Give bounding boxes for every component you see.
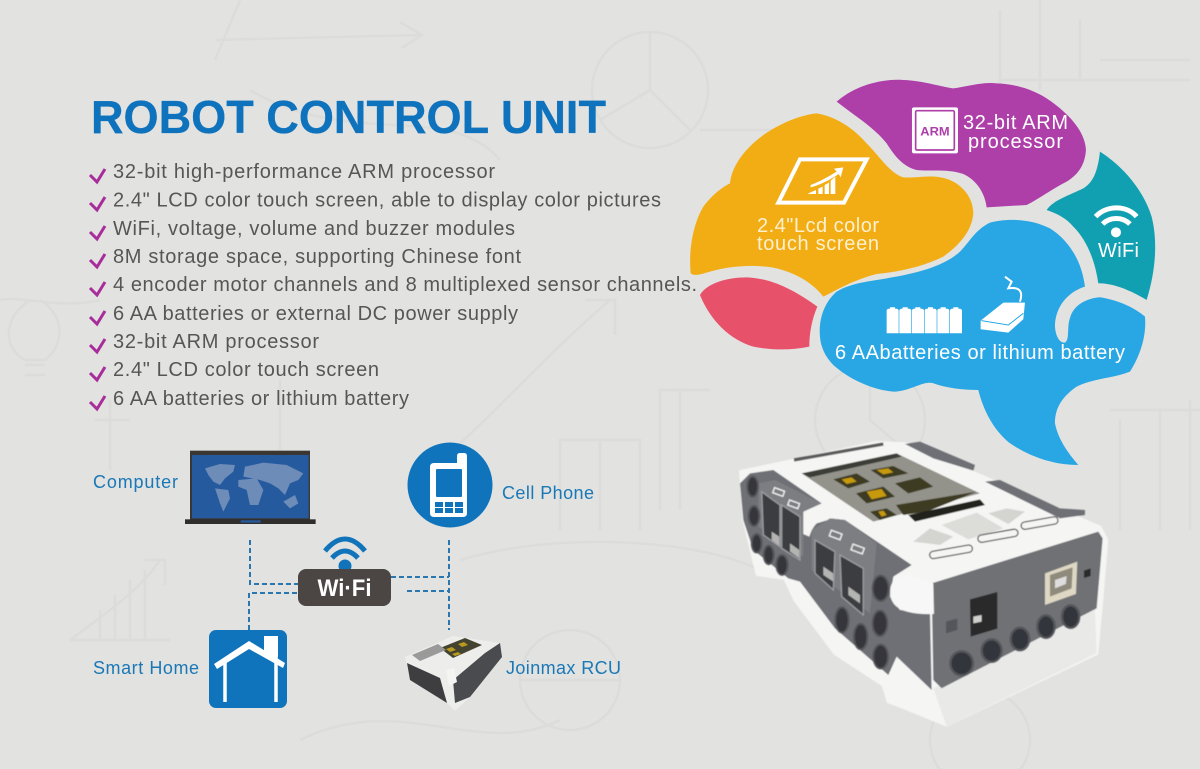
- front panel: [932, 532, 1103, 688]
- panel: WiFi: [1047, 152, 1155, 300]
- cloud labels: touch screen: [757, 233, 879, 255]
- icon: WiFi router badge: Wi·Fi: [318, 575, 372, 602]
- feature text lines: 4 encoder motor channels and 8 multiplexed sensor channels.: [113, 274, 697, 296]
- feature text lines: 2.4" LCD color touch screen, able to display color pictures: [113, 190, 661, 212]
- front holes: [950, 605, 1079, 675]
- icon: AA batteries: [887, 307, 962, 333]
- icon: tablet chart: [778, 159, 867, 203]
- feature text lines: 2.4" LCD color touch screen: [113, 359, 379, 381]
- label: cell phone: Cell Phone: [502, 483, 594, 503]
- icon: power adapter: [981, 277, 1025, 333]
- speech cloud diagram: [690, 80, 1155, 465]
- cloud labels: [757, 112, 1139, 364]
- label: Joinmax RCU: Joinmax RCU: [506, 658, 621, 678]
- RJ ports: [762, 492, 863, 615]
- white port divider: [802, 503, 837, 537]
- feature text lines: [113, 161, 697, 410]
- feature list: [90, 161, 697, 410]
- USB port: [1045, 562, 1077, 605]
- panel: LCD touch screen: [690, 113, 973, 297]
- label: smart home: Smart Home: [93, 658, 199, 678]
- DC jack: [970, 592, 997, 637]
- cloud labels: 2.4"Lcd color: [757, 215, 879, 237]
- dashed connectors: [249, 540, 449, 630]
- label: computer: Computer: [93, 472, 178, 492]
- side clips: [905, 442, 1085, 518]
- RJ port frames: [758, 480, 877, 613]
- check marks: [90, 169, 105, 409]
- model badge: [908, 499, 985, 522]
- feature text lines: 8M storage space, supporting Chinese font: [113, 246, 521, 268]
- panel: batteries: [820, 220, 1145, 465]
- cloud labels: processor: [968, 131, 1063, 153]
- connection diagram: [93, 442, 621, 711]
- cloud labels: 32-bit ARM: [963, 112, 1068, 134]
- device brand label: [794, 444, 883, 460]
- icon: cell phone: [408, 442, 492, 528]
- feature text lines: 6 AA batteries or external DC power supply: [113, 303, 518, 325]
- cloud labels: WiFi: [1098, 240, 1139, 262]
- feature text lines: 32-bit high-performance ARM processor: [113, 161, 495, 183]
- feature text lines: 32-bit ARM processor: [113, 331, 319, 353]
- port labels: [773, 488, 864, 554]
- buttons: [913, 528, 953, 545]
- product photo: robot control unit: [740, 442, 1107, 727]
- panel: ARM processor: [837, 80, 1086, 207]
- device body: [741, 443, 1107, 725]
- icon: ARM chip: [912, 107, 958, 153]
- panel: red blank: [700, 277, 817, 349]
- title: ROBOT CONTROL UNIT: [91, 91, 606, 143]
- icon: ARM chip: ARM: [920, 124, 950, 138]
- icon: WiFi signal: [1096, 208, 1137, 237]
- icon: laptop computer: [185, 451, 316, 524]
- feature text lines: 6 AA batteries or lithium battery: [113, 388, 409, 410]
- technic holes left: [747, 477, 889, 669]
- icon: WiFi router badge: [298, 539, 391, 606]
- white corner bumper: [890, 576, 934, 614]
- LCD screen: [802, 453, 980, 522]
- icon: small RCU: [405, 636, 502, 711]
- button labels: [929, 516, 1059, 559]
- left port band: [740, 470, 932, 690]
- feature text lines: WiFi, voltage, volume and buzzer modules: [113, 218, 515, 240]
- icon: smart home: [209, 630, 287, 708]
- cloud labels: 6 AAbatteries or lithium battery: [835, 342, 1125, 364]
